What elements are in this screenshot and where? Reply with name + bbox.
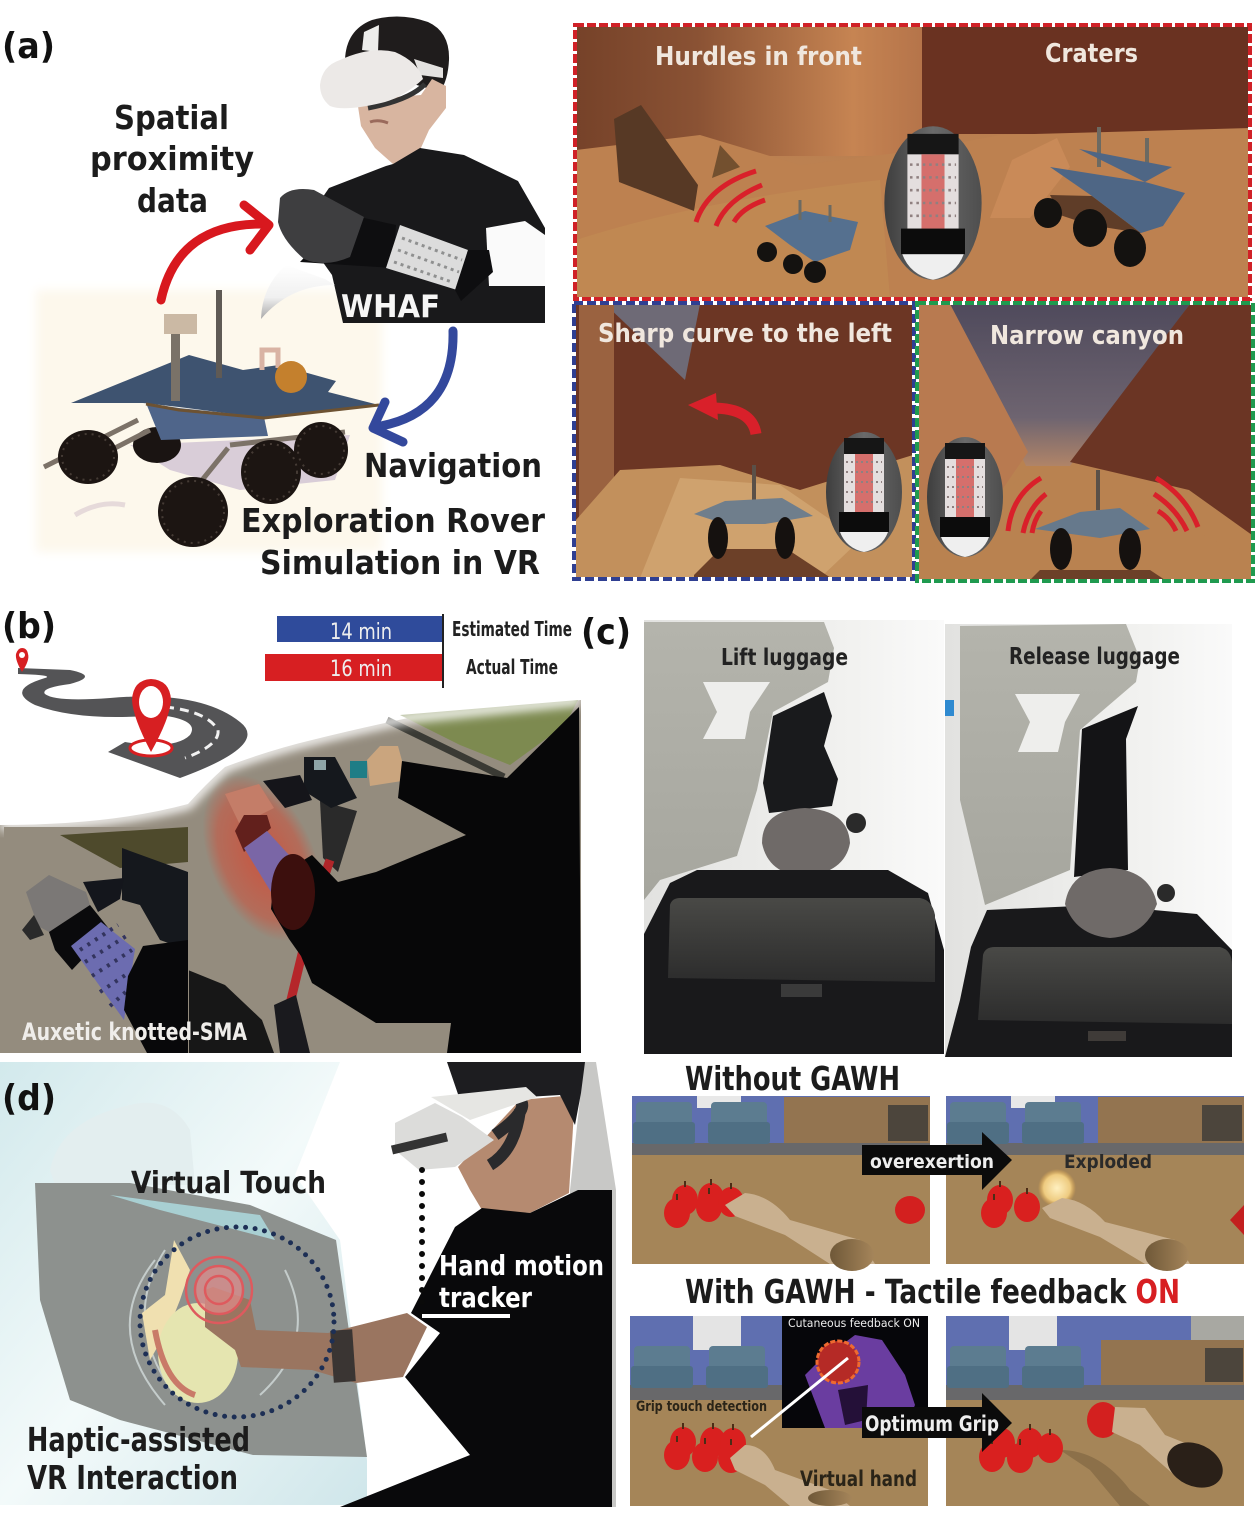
rover illustration	[44, 290, 379, 547]
inset: auxetic knotted SMA	[4, 827, 247, 1053]
heading: spatial proximity data: proximity	[90, 139, 254, 178]
time bars: 16 min	[330, 657, 392, 682]
scene label: canyon: Narrow canyon	[990, 321, 1184, 351]
scene: sharp curve	[576, 304, 913, 578]
panel c: luggage photos	[581, 612, 1232, 1057]
arrow: overexertion	[862, 1132, 1012, 1190]
time bars	[265, 614, 572, 688]
exploration rover label: Exploration Rover	[241, 501, 546, 540]
hand motion tracker label: Hand motion	[439, 1249, 604, 1282]
inset caption: Auxetic knotted-SMA	[22, 1018, 247, 1046]
tracker underline	[422, 1314, 510, 1318]
blue arrow	[373, 331, 453, 442]
hand motion tracker label: tracker	[439, 1281, 532, 1314]
VR frame: grip before	[632, 1096, 930, 1271]
scene label: hurdles: Hurdles in front	[655, 42, 862, 72]
VR frame: exploded	[946, 1096, 1244, 1271]
virtual hand caption: Virtual hand	[800, 1467, 917, 1491]
label b: (b)	[2, 606, 56, 647]
arrow: optimum grip: Optimum Grip	[865, 1412, 999, 1436]
time bars: 14 min	[330, 620, 392, 645]
scene label: curve: Sharp curve to the left	[598, 319, 892, 349]
time bars: Actual Time	[466, 655, 558, 679]
haptic-assisted label: Haptic-assisted	[27, 1420, 250, 1459]
arrow: overexertion: overexertion	[870, 1151, 994, 1173]
person wearing VR headset	[261, 16, 545, 323]
grip caption: Grip touch detection	[636, 1399, 767, 1415]
photo: release luggage	[945, 624, 1232, 1057]
road icon	[16, 648, 248, 778]
dashed frames	[574, 25, 1253, 581]
haptic-assisted label: VR Interaction	[27, 1458, 238, 1497]
WHAF label: WHAF	[341, 289, 440, 325]
exploration rover label	[241, 501, 546, 582]
ghost headset reflection	[50, 1103, 195, 1185]
caption: lift luggage: Lift luggage	[721, 645, 848, 671]
label d: (d)	[2, 1078, 56, 1119]
scene label: craters: Craters	[1045, 39, 1138, 69]
time bars: Estimated Time	[452, 617, 572, 641]
background wedge	[0, 1062, 367, 1505]
arrow: optimum grip	[862, 1393, 1012, 1452]
panel d: VR interaction	[0, 1059, 1244, 1507]
scooter photo	[0, 700, 581, 1053]
dotted pointer	[419, 1170, 425, 1315]
heading: spatial proximity data: data	[137, 181, 208, 220]
scene: hurdles and craters	[576, 26, 1250, 298]
hand motion tracker label	[439, 1249, 604, 1314]
photo: lift luggage	[644, 620, 944, 1054]
scene: narrow canyon	[918, 304, 1252, 580]
VR frame: optimum grip	[946, 1316, 1244, 1506]
heading: spatial proximity data	[90, 98, 254, 220]
exploration rover label: Simulation in VR	[260, 543, 540, 582]
panel b: e-scooter navigation	[0, 606, 581, 1053]
haptic-assisted label	[27, 1420, 250, 1497]
without GAWH heading: Without GAWH	[685, 1059, 900, 1098]
exploded caption: Exploded	[1064, 1151, 1152, 1173]
virtual touch label: Virtual Touch	[131, 1166, 326, 1201]
heading: spatial proximity data: Spatial	[114, 98, 229, 137]
inset: cutaneous feedback: Cutaneous feedback ON	[788, 1316, 920, 1330]
with GAWH heading: With GAWH - Tactile feedback ON	[685, 1272, 1180, 1311]
inset: cutaneous feedback	[751, 1316, 928, 1437]
navigation label: Navigation	[364, 446, 542, 485]
red arrow	[161, 205, 269, 300]
label c: (c)	[581, 612, 631, 653]
background glow behind rover	[36, 290, 382, 552]
VR frame: grip detection	[630, 1316, 928, 1506]
panel a: rover simulation diagram	[2, 16, 1253, 582]
caption: release luggage: Release luggage	[1009, 644, 1180, 670]
label a: (a)	[2, 26, 55, 67]
virtual touch tablet	[35, 1183, 427, 1457]
man with headset	[340, 1062, 616, 1507]
